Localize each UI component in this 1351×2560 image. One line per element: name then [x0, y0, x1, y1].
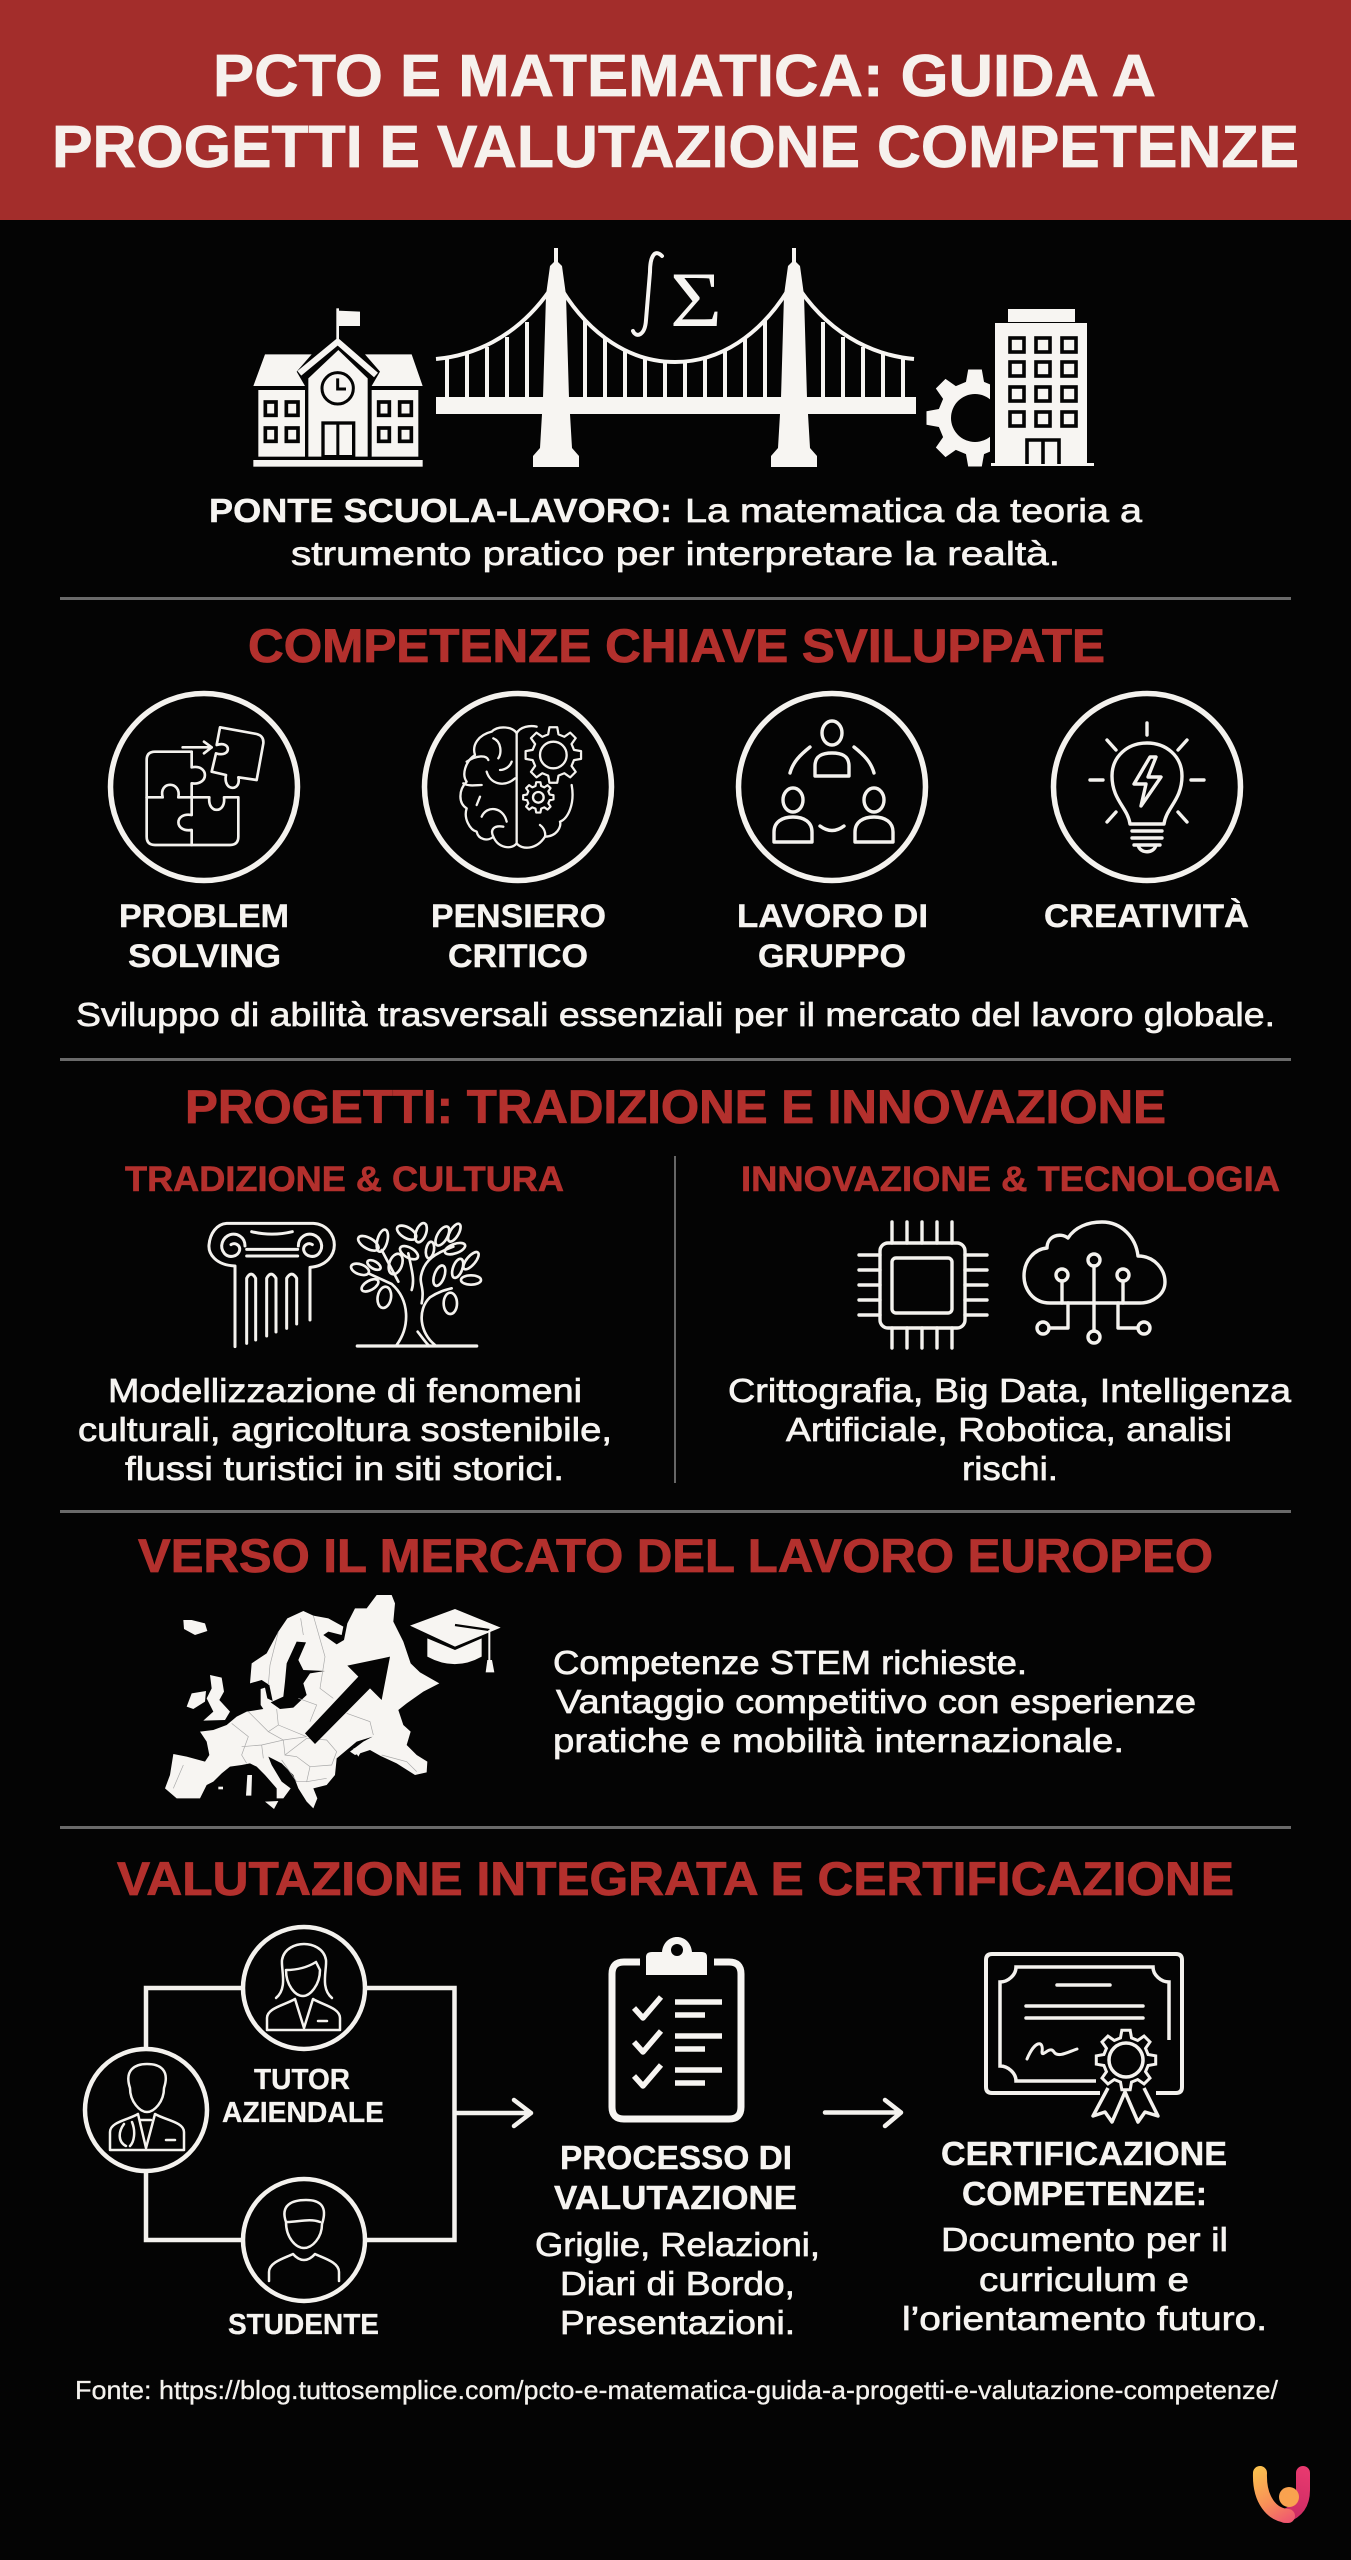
math symbols: integral and sigma	[633, 253, 722, 343]
icon: puzzle	[110, 694, 298, 880]
icon: light bulb	[1054, 694, 1240, 880]
text: ponte scuola-lavoro: PONTE SCUOLA-LAVORO:	[209, 492, 672, 529]
text: ponte scuola-lavoro: La matematica da teoria a	[685, 492, 1143, 529]
subheading: tradizione: TRADIZIONE & CULTURA	[125, 1160, 564, 1199]
text: tradizione: flussi turistici in siti storici.	[125, 1450, 564, 1487]
text: abilità trasversali: Sviluppo di abilità trasversali essenziali per il mercato del lavoro globale.	[76, 996, 1275, 1033]
panel: ponte scuola-lavoro	[209, 248, 1143, 572]
text: certificazione: curriculum e	[979, 2261, 1189, 2298]
text: innovazione: rischi.	[962, 1450, 1058, 1487]
text: certificazione: COMPETENZE:	[962, 2175, 1207, 2212]
map: europe with growth arrow	[165, 1595, 439, 1809]
header banner	[0, 0, 1351, 220]
text: ponte scuola-lavoro: strumento pratico per interpretare la realtà.	[291, 535, 1060, 572]
labels: competenze: LAVORO DI	[737, 898, 928, 934]
text: processo di valutazione: VALUTAZIONE	[554, 2179, 797, 2216]
text: innovazione: Artificiale, Robotica, analisi	[786, 1411, 1232, 1448]
panel: mercato europeo	[138, 1529, 1213, 1809]
panel: valutazione	[85, 1852, 1267, 2341]
text: processo di valutazione	[535, 2139, 820, 2341]
text: mercato europeo: pratiche e mobilità internazionale.	[553, 1722, 1124, 1759]
icon: teamwork	[738, 694, 926, 880]
text: processo di valutazione: Diari di Bordo,	[560, 2265, 795, 2302]
labels: competenze: CREATIVITÀ	[1044, 898, 1249, 934]
labels: competenze	[119, 898, 1249, 974]
icon: olive tree	[350, 1222, 481, 1346]
text: tradizione: culturali, agricoltura sostenibile,	[78, 1411, 612, 1448]
label: studente: STUDENTE	[228, 2309, 379, 2341]
diagram: tutor connections	[146, 1988, 531, 2240]
icon: ionic column	[209, 1223, 334, 1347]
text: certificazione: CERTIFICAZIONE	[941, 2135, 1227, 2172]
text: mercato europeo: Competenze STEM richieste.	[553, 1644, 1027, 1681]
labels: competenze: GRUPPO	[758, 938, 906, 974]
text: tradizione	[78, 1372, 612, 1487]
text: processo di valutazione: Presentazioni.	[560, 2304, 795, 2341]
labels: competenze: PROBLEM	[119, 898, 289, 934]
icon: gear and office building	[926, 309, 1094, 467]
panel: progetti	[78, 1080, 1292, 1487]
text: certificazione: l’orientamento futuro.	[902, 2300, 1267, 2337]
labels: competenze: PENSIERO	[431, 898, 606, 934]
icon: student	[243, 2179, 365, 2301]
text: tradizione: Modellizzazione di fenomeni	[108, 1372, 582, 1409]
icon: microchip	[859, 1222, 987, 1348]
text: mercato europeo: Vantaggio competitivo con esperienze	[556, 1683, 1196, 1720]
heading: valutazione: VALUTAZIONE INTEGRATA E CERTIFICAZIONE	[117, 1852, 1234, 1905]
text: ponte scuola-lavoro	[209, 492, 1143, 572]
arrow: to certificazione	[825, 2100, 901, 2126]
icon: cloud network	[1024, 1222, 1165, 1343]
labels: competenze: CRITICO	[448, 938, 588, 974]
panel: competenze chiave	[76, 619, 1275, 1033]
heading: competenze chiave: COMPETENZE CHIAVE SVILUPPATE	[248, 619, 1105, 672]
source line: Fonte: https://blog.tuttosemplice.com/pcto-e-matematica-guida-a-progetti-e-valutazione-competenze/	[75, 2375, 1279, 2405]
icon: graduation cap	[410, 1609, 501, 1672]
text: processo di valutazione: PROCESSO DI	[560, 2139, 792, 2176]
title: PCTO E MATEMATICA: GUIDA A	[213, 43, 1156, 109]
math symbols: integral and sigma: Σ	[670, 256, 722, 343]
text: innovazione: Crittografia, Big Data, Intelligenza	[728, 1372, 1292, 1409]
icon: brain and gears	[424, 694, 612, 880]
text: processo di valutazione: Griglie, Relazioni,	[535, 2226, 820, 2263]
icon: clipboard	[612, 1937, 741, 2119]
labels: tutor: TUTOR	[254, 2064, 350, 2096]
icon: suspension bridge	[436, 248, 916, 467]
arrow: to valutazione	[455, 2100, 531, 2126]
title: PROGETTI E VALUTAZIONE COMPETENZE	[52, 114, 1299, 180]
heading: progetti: PROGETTI: TRADIZIONE E INNOVAZIONE	[185, 1080, 1166, 1133]
icon: logo	[1260, 2473, 1303, 2516]
labels: tutor	[222, 2064, 384, 2129]
icon: certificate	[986, 1954, 1182, 2122]
heading: mercato europeo: VERSO IL MERCATO DEL LAVORO EUROPEO	[138, 1529, 1213, 1582]
text: certificazione: Documento per il	[941, 2221, 1228, 2258]
icon: school	[253, 308, 423, 467]
icon: company tutor with stethoscope	[85, 2049, 207, 2171]
title	[52, 43, 1299, 180]
text: mercato europeo	[553, 1644, 1196, 1759]
text: certificazione	[902, 2135, 1267, 2337]
subheading: innovazione: INNOVAZIONE & TECNOLOGIA	[741, 1160, 1280, 1199]
icon: female tutor	[243, 1927, 365, 2049]
labels: tutor: AZIENDALE	[222, 2097, 384, 2129]
labels: competenze: SOLVING	[128, 938, 281, 974]
text: innovazione	[728, 1372, 1292, 1487]
